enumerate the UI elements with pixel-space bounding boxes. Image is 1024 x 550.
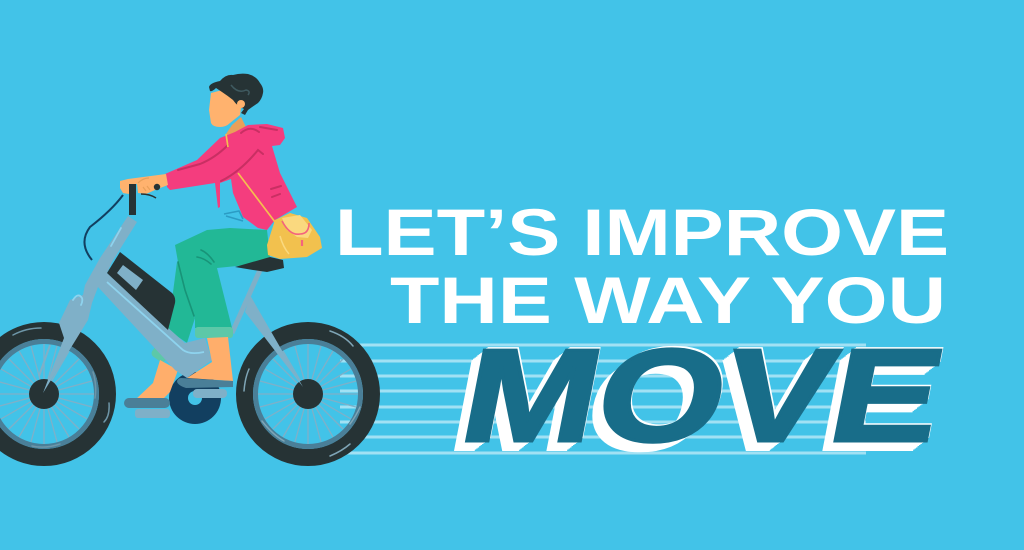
far leg and foot [124, 262, 195, 418]
headline line 1: LET’S IMPROVE [335, 195, 949, 269]
saddle [235, 257, 284, 272]
hand [120, 174, 168, 198]
hoodie [165, 124, 297, 230]
near leg, pants [175, 228, 270, 338]
head and hair [209, 74, 263, 140]
chainring [169, 372, 221, 424]
speed lines [340, 345, 866, 453]
battery [107, 252, 175, 330]
front wheel [0, 328, 109, 458]
headline: MOVE: MOVE [451, 322, 955, 469]
headline line 2: THE WAY YOU [390, 263, 946, 337]
rear wheel [244, 330, 372, 458]
bag [267, 213, 322, 259]
near foot and shoe [177, 337, 233, 398]
bike frame [39, 183, 303, 393]
